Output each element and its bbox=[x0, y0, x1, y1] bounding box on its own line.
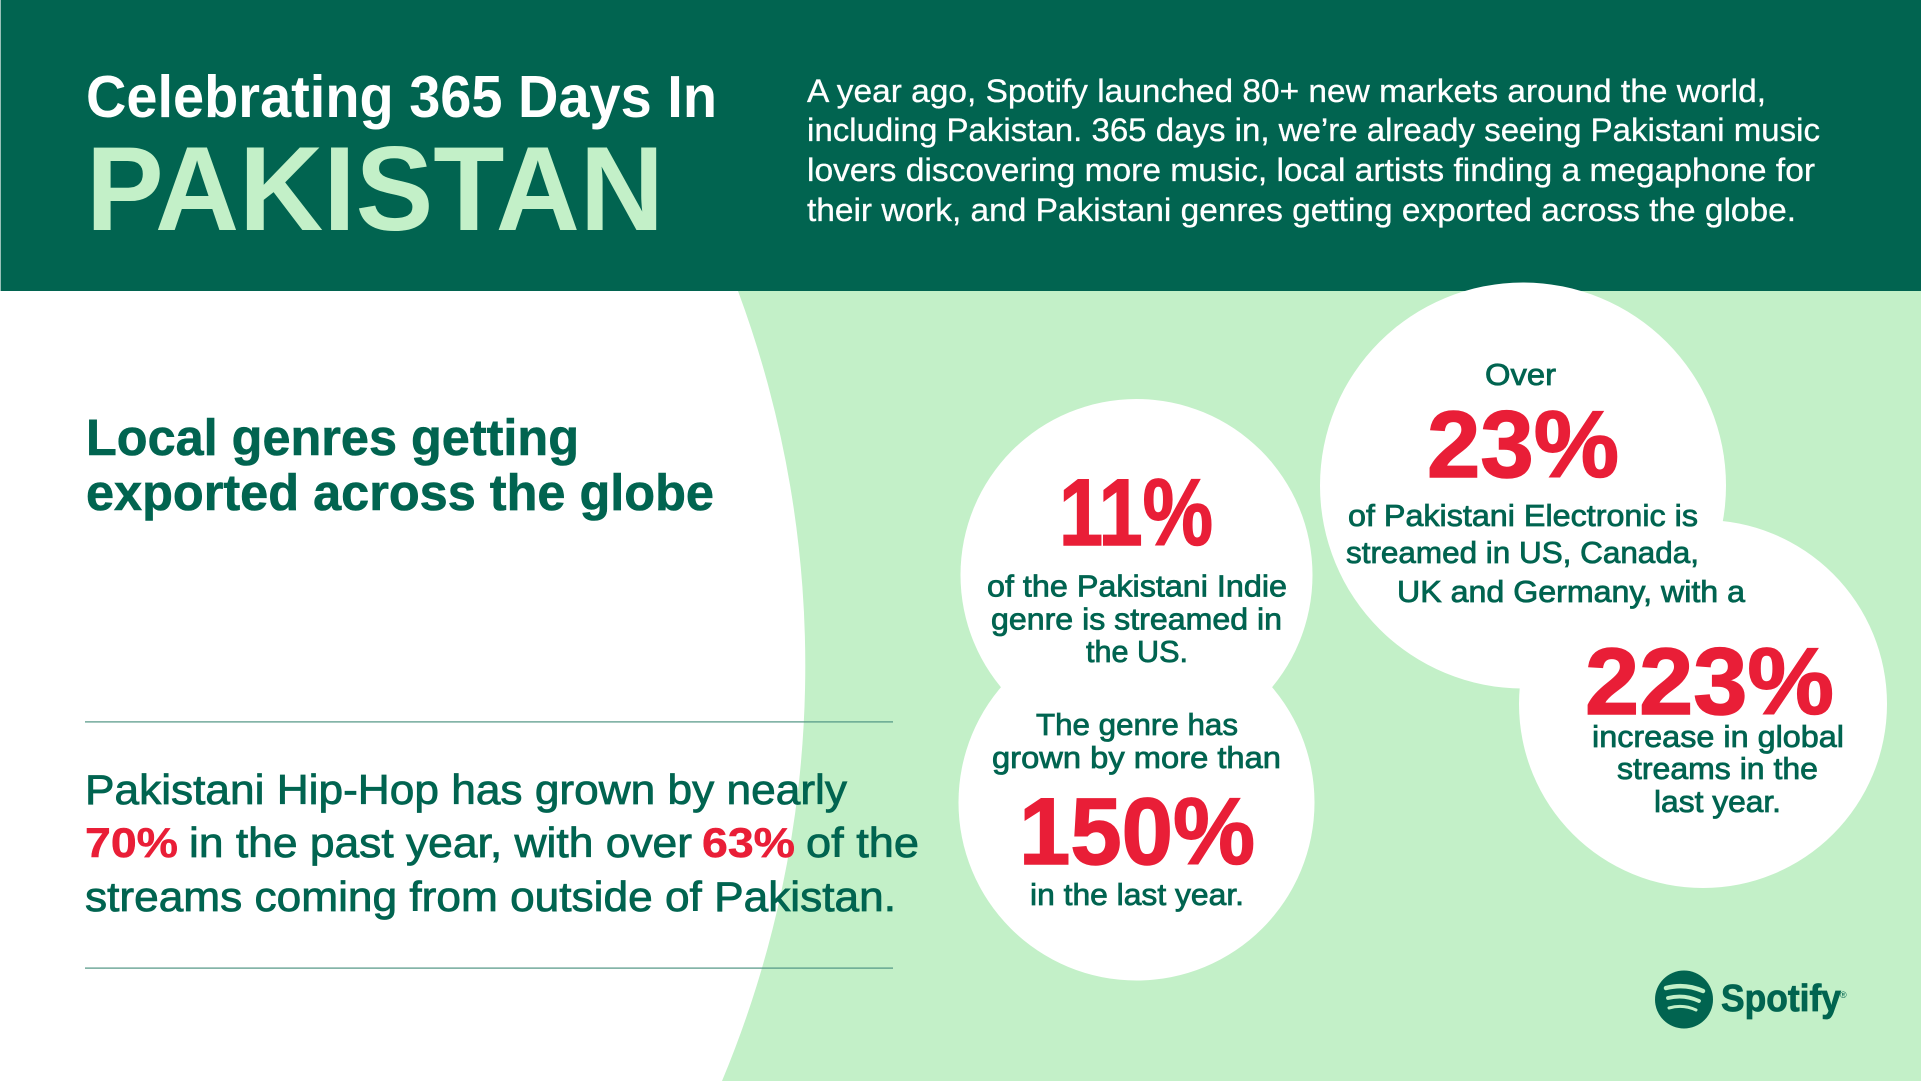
intro paragraph: lovers discovering more music, local artists finding a megaphone for bbox=[807, 152, 1815, 188]
section heading: Local genres getting bbox=[86, 409, 579, 466]
section heading bbox=[86, 409, 714, 521]
intro paragraph: including Pakistan. 365 days in, we’re already seeing Pakistani music bbox=[807, 112, 1820, 148]
bubble: indie 11%: the US. bbox=[1086, 634, 1188, 669]
header band bbox=[1, 0, 1921, 291]
bubble: global increase 223%: increase in global bbox=[1592, 719, 1844, 754]
hip-hop statement: in the past year, with over bbox=[189, 819, 692, 866]
bubble: genre growth 150%: The genre has bbox=[1036, 707, 1238, 742]
section heading: exported across the globe bbox=[86, 464, 714, 521]
bubble: electronic 23%: streamed in US, Canada, bbox=[1346, 535, 1699, 570]
bubble: electronic 23%: Over bbox=[1485, 357, 1556, 392]
bubble: global increase 223%: 223% bbox=[1585, 629, 1834, 735]
background: light green curved panel bbox=[722, 291, 1921, 1081]
bubble: indie 11% bbox=[987, 460, 1287, 669]
Spotify logo bbox=[1655, 970, 1847, 1028]
intro paragraph bbox=[807, 73, 1820, 228]
icon: Spotify circle with sound waves bbox=[1655, 970, 1713, 1028]
bubble: electronic 23% bbox=[1346, 357, 1746, 609]
title: PAKISTAN: PAKISTAN bbox=[86, 122, 664, 256]
bubble: electronic 23%: of Pakistani Electronic is bbox=[1348, 498, 1698, 533]
wordmark: Spotify bbox=[1721, 978, 1841, 1020]
bubble: global increase 223% bbox=[1585, 629, 1844, 819]
hip-hop statement: 70% bbox=[85, 819, 178, 866]
bubble: genre growth 150% bbox=[992, 707, 1281, 912]
bubble: indie 11%: of the Pakistani Indie bbox=[987, 568, 1287, 604]
registered mark: ® bbox=[1840, 990, 1847, 1000]
bubble: indie 11%: 11% bbox=[1059, 460, 1213, 566]
bubble: genre growth 150%: grown by more than bbox=[992, 740, 1281, 775]
bubble: global increase 223%: streams in the bbox=[1617, 751, 1818, 786]
bubble: electronic 23%: 23% bbox=[1427, 392, 1619, 498]
title line: Celebrating 365 Days In bbox=[86, 64, 717, 130]
bubble: electronic 23%: UK and Germany, with a bbox=[1397, 574, 1746, 609]
hip-hop statement: streams coming from outside of Pakistan. bbox=[85, 873, 896, 920]
bubble: global increase 223%: last year. bbox=[1654, 784, 1781, 819]
bubble: genre growth 150%: 150% bbox=[1019, 779, 1255, 885]
intro paragraph: A year ago, Spotify launched 80+ new markets around the world, bbox=[807, 73, 1766, 109]
bubble: genre growth 150%: in the last year. bbox=[1030, 877, 1244, 912]
hip-hop statement: 63% bbox=[702, 819, 795, 866]
intro paragraph: their work, and Pakistani genres getting exported across the globe. bbox=[807, 192, 1796, 228]
hip-hop statement: of the bbox=[806, 819, 919, 866]
hip-hop statement: Pakistani Hip-Hop has grown by nearly bbox=[85, 766, 847, 813]
white bubbles bbox=[958, 282, 1887, 980]
hip-hop statement bbox=[85, 766, 919, 920]
bubble: indie 11%: genre is streamed in bbox=[991, 602, 1282, 636]
